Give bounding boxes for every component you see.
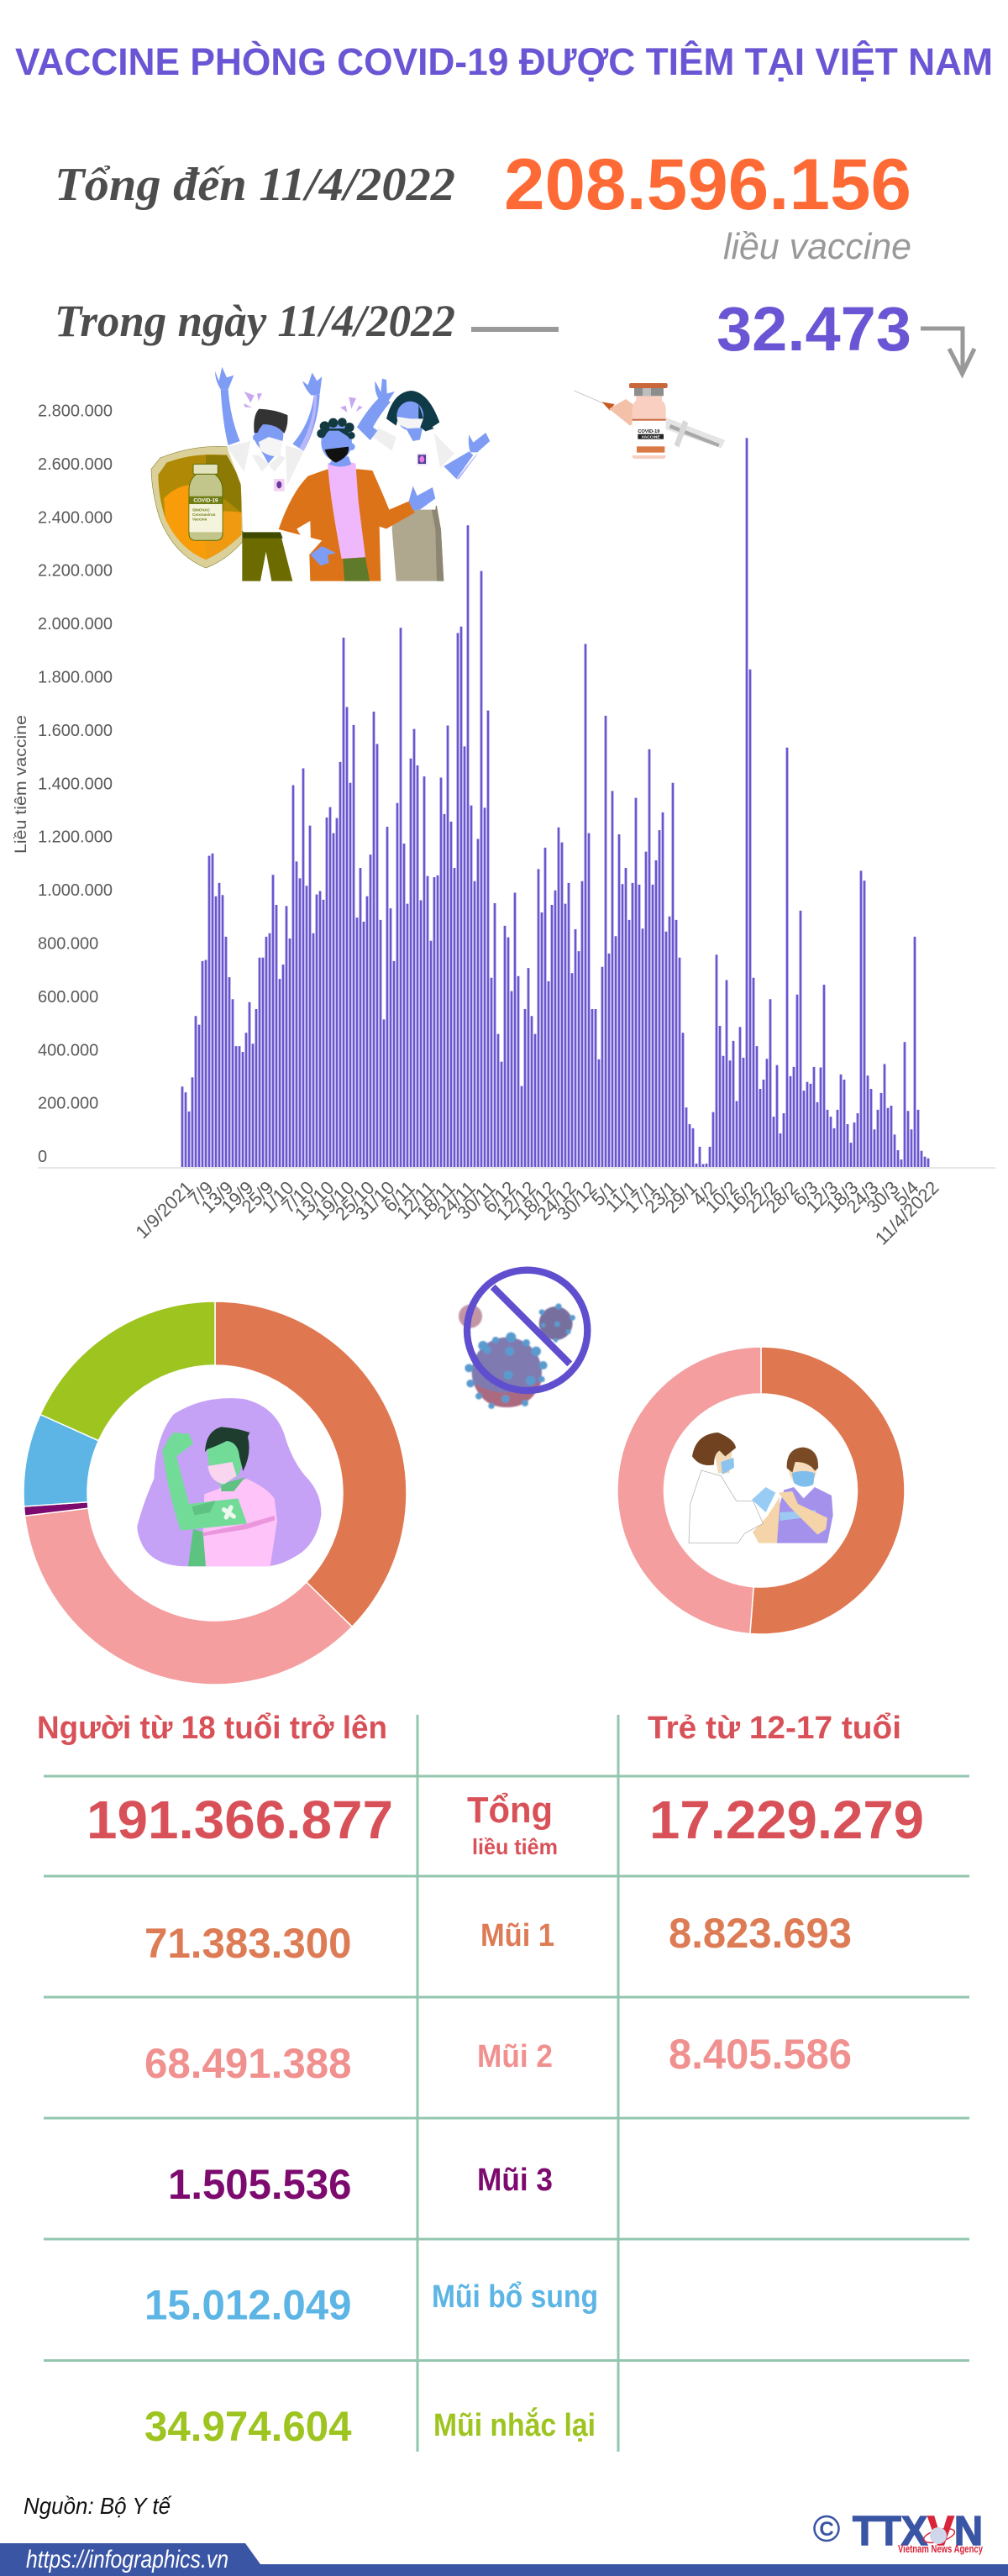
x axis labels: 12/3 xyxy=(802,1177,843,1217)
row: total: 191.366.877 xyxy=(87,1790,393,1850)
y axis labels: 0 xyxy=(38,1148,47,1166)
x axis labels: 5/1 xyxy=(587,1177,621,1210)
row: dose 1 xyxy=(144,1910,852,1967)
row: dose 1: 8.823.693 xyxy=(669,1910,852,1957)
row: dose 3: Mũi 3 xyxy=(477,2163,553,2198)
daily bars xyxy=(182,438,928,1167)
man left xyxy=(215,367,322,581)
x axis labels: 6/3 xyxy=(789,1177,822,1210)
table grid xyxy=(44,1715,969,2452)
x axis labels: 24/3 xyxy=(843,1177,883,1217)
row: dose 2: Mũi 2 xyxy=(477,2039,553,2074)
source: Nguồn: Bộ Y tế xyxy=(24,2493,172,2519)
x axis labels: 1/10 xyxy=(258,1177,298,1217)
x axis labels: 19/10 xyxy=(311,1177,359,1224)
footer bar xyxy=(0,2543,1008,2576)
icon: shield with vaccine vial: Vaccine xyxy=(192,517,207,521)
x axis labels: 30/12 xyxy=(553,1177,601,1224)
x axis labels xyxy=(131,1177,943,1249)
y axis title: Liều tiêm vaccine xyxy=(13,715,30,854)
row: dose 3 xyxy=(168,2161,553,2208)
x axis labels: 5/4 xyxy=(890,1177,923,1210)
x axis labels: 24/12 xyxy=(533,1177,580,1224)
y axis labels: 1.800.000 xyxy=(38,669,113,687)
logo: TTXVN: TTXVN xyxy=(853,2509,983,2554)
y axis labels xyxy=(38,402,113,1166)
x axis labels: 4/2 xyxy=(688,1177,722,1210)
row: dose 1: Mũi 1 xyxy=(480,1918,554,1953)
x axis labels: 19/9 xyxy=(218,1177,258,1217)
table xyxy=(37,1711,969,2452)
daily number: 32.473 xyxy=(717,294,911,364)
row: dose 3: 1.505.536 xyxy=(168,2161,351,2208)
footer bar: https://infographics.vn xyxy=(26,2546,228,2573)
y axis labels: 1.000.000 xyxy=(38,881,113,900)
x axis labels: 29/1 xyxy=(661,1177,701,1217)
x axis labels: 7/9 xyxy=(184,1177,218,1210)
x axis labels: 7/10 xyxy=(278,1177,318,1217)
icon: vaccine vial and syringe: COVID-19 xyxy=(638,429,659,434)
y axis labels: 200.000 xyxy=(38,1095,98,1113)
daily label: Trong ngày 11/4/2022 xyxy=(55,296,455,346)
y axis labels: 400.000 xyxy=(38,1041,98,1059)
icon: shield with vaccine vial: SINOVAC xyxy=(192,508,211,513)
x axis labels: 17/1 xyxy=(621,1177,661,1217)
y axis labels: 1.200.000 xyxy=(38,828,113,847)
x axis labels: 25/10 xyxy=(331,1177,379,1224)
icon: vaccine vial and syringe xyxy=(574,383,725,459)
x axis labels: 1/9/2021 xyxy=(131,1177,197,1243)
icon: no virus sign xyxy=(459,1270,587,1409)
connector line xyxy=(471,327,559,332)
y axis labels: 2.800.000 xyxy=(38,402,113,420)
row: dose 2: 8.405.586 xyxy=(669,2031,852,2078)
y axis labels: 1.600.000 xyxy=(38,722,113,740)
x axis labels: 18/12 xyxy=(512,1177,560,1224)
row: additional dose: 15.012.049 xyxy=(144,2282,351,2329)
donut chart: adults xyxy=(24,1301,407,1685)
x axis labels: 13/9 xyxy=(197,1177,238,1217)
x axis labels: 11/4/2022 xyxy=(871,1177,943,1249)
illustration: three cheering people xyxy=(215,367,490,581)
x axis labels: 6/12 xyxy=(480,1177,520,1217)
y axis labels: 600.000 xyxy=(38,988,98,1007)
row: booster dose: 34.974.604 xyxy=(144,2403,352,2450)
icon: shield with vaccine vial xyxy=(151,446,244,568)
column heading: adults: Người từ 18 tuổi trở lên xyxy=(37,1711,387,1746)
y axis labels: 1.400.000 xyxy=(38,775,113,793)
y axis labels: 2.200.000 xyxy=(38,562,113,581)
y axis labels: 2.400.000 xyxy=(38,508,113,527)
x axis labels: 12/11 xyxy=(392,1177,439,1223)
total unit: liều vaccine xyxy=(723,226,911,267)
title: VACCINE PHÒNG COVID-19 ĐƯỢC TIÊM TẠI VIỆT NAM xyxy=(15,40,993,83)
row: total: liều tiêm xyxy=(472,1834,558,1859)
x axis labels: 18/3 xyxy=(822,1177,863,1217)
icon: shield with vaccine vial: Coronavirus xyxy=(192,513,216,517)
x axis labels: 23/1 xyxy=(641,1177,681,1217)
x axis labels: 6/11 xyxy=(380,1177,419,1217)
y axis labels: 2.000.000 xyxy=(38,615,113,633)
total number: 208.596.156 xyxy=(504,145,911,225)
x axis labels: 28/2 xyxy=(762,1177,802,1217)
row: total: 17.229.279 xyxy=(649,1790,924,1850)
row: dose 2: 68.491.388 xyxy=(144,2040,351,2087)
bar chart xyxy=(13,402,995,1249)
row: additional dose xyxy=(144,2279,598,2329)
row: dose 1: 71.383.300 xyxy=(144,1920,351,1967)
x axis labels: 12/12 xyxy=(492,1177,540,1224)
icon: vaccine vial and syringe: VACCINE xyxy=(642,434,660,439)
total label: Tổng đến 11/4/2022 xyxy=(55,159,455,211)
x axis labels: 24/11 xyxy=(433,1177,480,1223)
row: total: Tổng xyxy=(467,1790,553,1831)
illustration: nurse vaccinating a boy xyxy=(689,1433,833,1543)
illustration: man with bandaged arm xyxy=(137,1398,321,1566)
row: booster dose xyxy=(144,2403,596,2450)
man middle xyxy=(279,418,435,581)
woman xyxy=(357,379,490,581)
y axis labels: 2.600.000 xyxy=(38,455,113,474)
x axis labels: 30/3 xyxy=(863,1177,903,1217)
row: additional dose: Mũi bổ sung xyxy=(432,2279,598,2315)
y axis labels: 800.000 xyxy=(38,934,98,953)
donut chart: children xyxy=(617,1347,905,1634)
x axis labels: 16/2 xyxy=(722,1177,762,1217)
x axis labels: 22/2 xyxy=(742,1177,782,1217)
x axis labels: 31/10 xyxy=(351,1177,399,1224)
x axis labels: 30/11 xyxy=(453,1177,500,1223)
row: booster dose: Mũi nhắc lại xyxy=(433,2406,596,2443)
x axis labels: 18/11 xyxy=(412,1177,459,1223)
icon: shield with vaccine vial: COVID-19 xyxy=(193,498,218,504)
row: dose 2 xyxy=(144,2031,852,2087)
logo: TTXVN: C xyxy=(819,2518,834,2541)
column heading: children: Trẻ từ 12-17 tuổi xyxy=(648,1711,901,1746)
arrow: down xyxy=(921,329,974,374)
row: total xyxy=(87,1790,924,1859)
axis line xyxy=(38,1167,995,1169)
x axis labels: 13/10 xyxy=(291,1177,339,1224)
x axis labels: 11/1 xyxy=(601,1177,641,1217)
x axis labels: 10/2 xyxy=(701,1177,742,1217)
x axis labels: 25/9 xyxy=(238,1177,278,1217)
sparkles xyxy=(244,392,363,413)
